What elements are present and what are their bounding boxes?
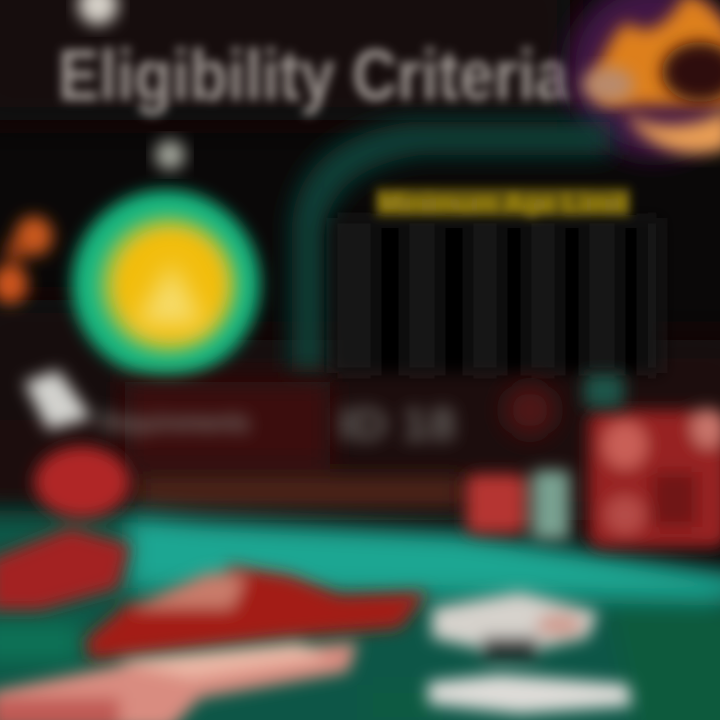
icon: top dot bbox=[78, 0, 118, 25]
text block: left caption: Requirements bbox=[100, 406, 250, 439]
title: Eligibility Criteria bbox=[58, 36, 571, 116]
icon: dark red accent bbox=[504, 384, 556, 436]
panel: striped chart area bbox=[332, 218, 662, 373]
icon: playing cards bbox=[428, 592, 632, 714]
panel: teal arch bbox=[292, 122, 610, 372]
icon: right chip stack bbox=[588, 408, 720, 548]
text block: centre caption: ID 18 bbox=[338, 398, 456, 450]
icon: pale chip pile bbox=[0, 642, 358, 720]
icon: chips centre bbox=[466, 374, 624, 540]
panel: maroon band bbox=[125, 382, 465, 504]
text block: left caption bbox=[24, 370, 250, 439]
panel: teal table bbox=[0, 510, 720, 720]
icon: flame badge bbox=[567, 0, 720, 158]
icon: green ring with yellow coin bbox=[72, 190, 260, 378]
icon: left chip pile bbox=[0, 446, 428, 660]
icon: small dot bbox=[155, 140, 185, 170]
icon: orange blobs bbox=[0, 216, 53, 304]
heading: yellow label: Minimum Age Limit bbox=[378, 188, 628, 218]
panel: stage backdrop bbox=[0, 0, 720, 520]
